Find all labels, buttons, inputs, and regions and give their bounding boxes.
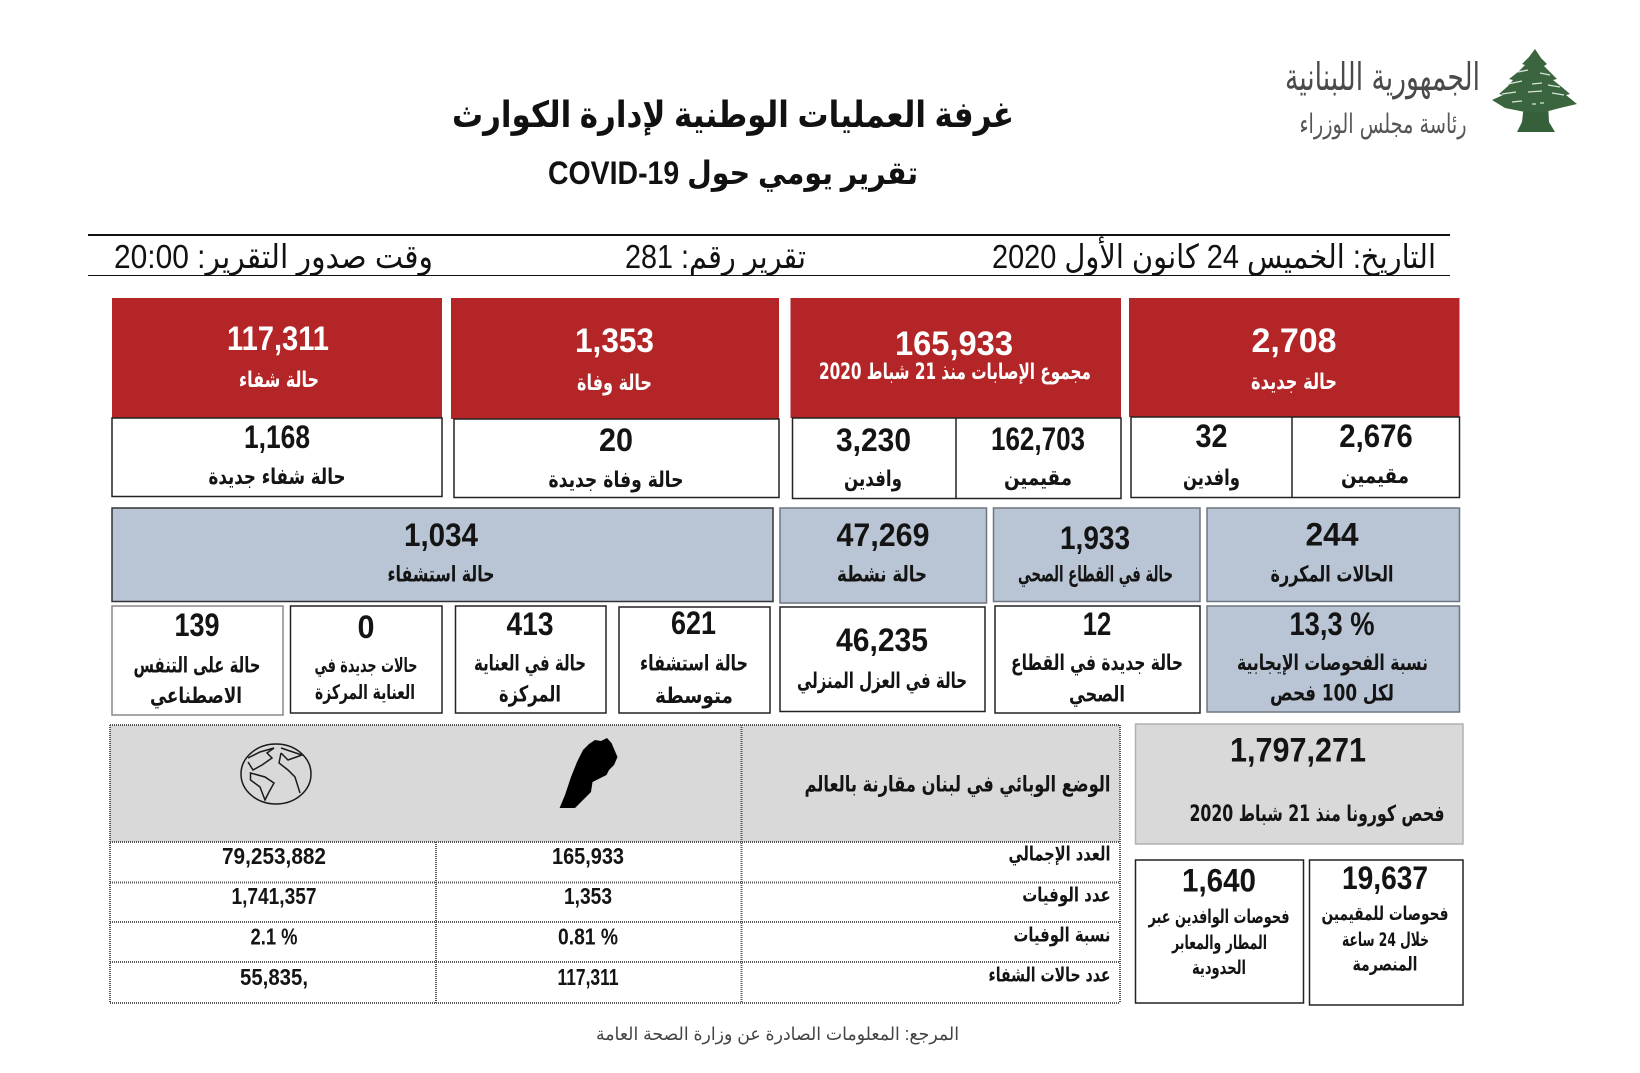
world total: 79,253,882 (222, 843, 326, 869)
positivity label line 2: لكل 100 فحص (1270, 682, 1394, 706)
logo text: رئاسة مجلس الوزراء: رئاسة مجلس الوزراء (1300, 109, 1466, 140)
home isolation label: حالة في العزل المنزلي (797, 669, 967, 694)
deaths value: 1,353 (575, 322, 654, 360)
logo: Lebanese Republic cedar and calligraphy (1285, 49, 1577, 140)
Lebanon recoveries: 117,311 (558, 964, 619, 990)
recoveries value: 117,311 (227, 320, 329, 358)
ICU label: حالة في العناية (474, 652, 586, 676)
Lebanon deaths: 1,353 (564, 883, 612, 909)
moderate value: 621 (671, 605, 716, 641)
residents value: 162,703 (991, 421, 1085, 457)
new deaths value: 20 (599, 422, 633, 458)
row label: deaths: عدد الوفيات (1022, 882, 1111, 906)
icon: globe (241, 744, 311, 804)
new health sector label line 2: الصحي (1069, 682, 1125, 708)
repeated cases label: الحالات المكررة (1270, 562, 1394, 588)
positivity label: نسبة الفحوصات الإيجابية (1237, 651, 1428, 676)
new residents value: 2,676 (1339, 418, 1413, 454)
new cases label: حالة جديدة (1251, 370, 1337, 395)
new recoveries value: 1,168 (244, 419, 310, 455)
subtitle: تقرير يومي حول COVID-19 (548, 155, 918, 192)
report info bar (88, 235, 1450, 276)
icon: Lebanon map (560, 738, 618, 808)
new recoveries label: حالة شفاء جديدة (208, 465, 346, 490)
panel: positivity rate (1207, 606, 1460, 712)
health sector value: 1,933 (1060, 520, 1130, 556)
report time: وقت صدور التقرير: 20:00 (114, 238, 433, 276)
panel: arrivals tests (1136, 860, 1304, 1003)
new health sector label: حالة جديدة في القطاع (1011, 651, 1183, 676)
repeated cases value: 244 (1306, 516, 1359, 552)
arrivals tests label line 2: المطار والمعابر (1171, 932, 1267, 954)
world fatality rate: 2.1 % (250, 924, 298, 950)
deaths label: حالة وفاة (577, 371, 652, 396)
arrivals tests value: 1,640 (1182, 862, 1256, 898)
panel: new cases (1129, 298, 1460, 498)
source note: المرجع: المعلومات الصادرة عن وزارة الصحة العامة (596, 1024, 959, 1045)
active cases value: 47,269 (836, 517, 930, 553)
panel: ICU cases (456, 606, 606, 713)
panel: recoveries (112, 298, 442, 496)
new deaths label: حالة وفاة جديدة (548, 468, 684, 493)
arrivals value: 3,230 (836, 422, 911, 458)
world deaths: 1,741,357 (232, 883, 316, 909)
new residents label: مقيمين (1341, 464, 1409, 489)
new ICU label: حالات جديدة في (314, 653, 418, 678)
moderate label: حالة استشفاء (640, 652, 748, 676)
panel: hospitalised (112, 508, 773, 602)
row label: recoveries: عدد حالات الشفاء (988, 962, 1110, 986)
moderate label line 2: متوسطة (655, 684, 733, 709)
total cases value: 165,933 (895, 325, 1013, 363)
ventilator label line 2: الاصطناعي (150, 684, 242, 709)
hospitalised value: 1,034 (404, 517, 478, 553)
total tests value: 1,797,271 (1230, 732, 1366, 770)
new health sector value: 12 (1083, 606, 1111, 642)
panel: moderate cases (619, 605, 770, 713)
table heading: الوضع الوبائي في لبنان مقارنة بالعالم (804, 772, 1110, 798)
panel: home isolation (780, 607, 985, 712)
title: غرفة العمليات الوطنية لإدارة الكوارث (452, 94, 1014, 136)
arrivals label: وافدين (844, 467, 902, 492)
panel: repeated cases (1207, 508, 1460, 602)
home isolation value: 46,235 (836, 622, 928, 658)
panel: total tests (1136, 724, 1463, 844)
new ICU label line 2: العناية المركزة (315, 680, 415, 704)
panel: new health sector cases (995, 606, 1200, 713)
panel: Lebanon vs world table (110, 725, 1120, 1003)
new ICU value: 0 (358, 609, 374, 645)
ICU label line 2: المركزة (499, 682, 561, 708)
report number: تقرير رقم: 281 (625, 238, 806, 276)
row label: fatality rate: نسبة الوفيات (1014, 922, 1110, 946)
panel: total cases (790, 298, 1121, 498)
arrivals tests label line 3: الحدودية (1192, 957, 1246, 979)
row label: total: العدد الإجمالي (1008, 842, 1110, 866)
active cases label: حالة نشطة (837, 562, 927, 588)
new arrivals value: 32 (1196, 418, 1228, 454)
panel: new ICU cases (290, 606, 442, 713)
world recoveries: 55,835, (240, 964, 308, 990)
new arrivals label: وافدين (1183, 466, 1240, 491)
ICU value: 413 (506, 606, 554, 642)
health sector label: حالة في القطاع الصحي (1018, 562, 1173, 588)
residents tests label line 3: المنصرمة (1352, 954, 1418, 976)
Lebanon total: 165,933 (552, 843, 624, 869)
panel: residents tests (1310, 860, 1463, 1005)
panel: on ventilator (112, 606, 283, 715)
residents tests label line 2: خلال 24 ساعة (1342, 929, 1429, 951)
Lebanon fatality rate: 0.81 % (558, 924, 618, 950)
positivity value: 13,3 % (1290, 606, 1374, 642)
icon: cedar tree (1492, 49, 1577, 132)
total tests label: فحص كورونا منذ 21 شباط 2020 (1190, 802, 1444, 827)
total cases label: مجموع الإصابات منذ 21 شباط 2020 (819, 360, 1091, 385)
panel: active cases (780, 508, 986, 603)
ventilator label: حالة على التنفس (134, 654, 260, 678)
residents tests value: 19,637 (1342, 860, 1428, 896)
recoveries label: حالة شفاء (239, 368, 319, 393)
residents label: مقيمين (1004, 466, 1072, 491)
arrivals tests label line 1: فحوصات الوافدين عبر (1148, 906, 1290, 928)
new cases value: 2,708 (1252, 322, 1336, 360)
logo text: الجمهورية اللبنانية: الجمهورية اللبنانية (1285, 55, 1480, 100)
ventilator value: 139 (174, 607, 220, 643)
panel: health sector (994, 508, 1200, 602)
residents tests label line 1: فحوصات للمقيمين (1322, 903, 1448, 925)
hospitalised label: حالة استشفاء (388, 562, 494, 588)
date: التاريخ: الخميس 24 كانون الأول 2020 (992, 236, 1436, 276)
panel: deaths (451, 298, 779, 498)
